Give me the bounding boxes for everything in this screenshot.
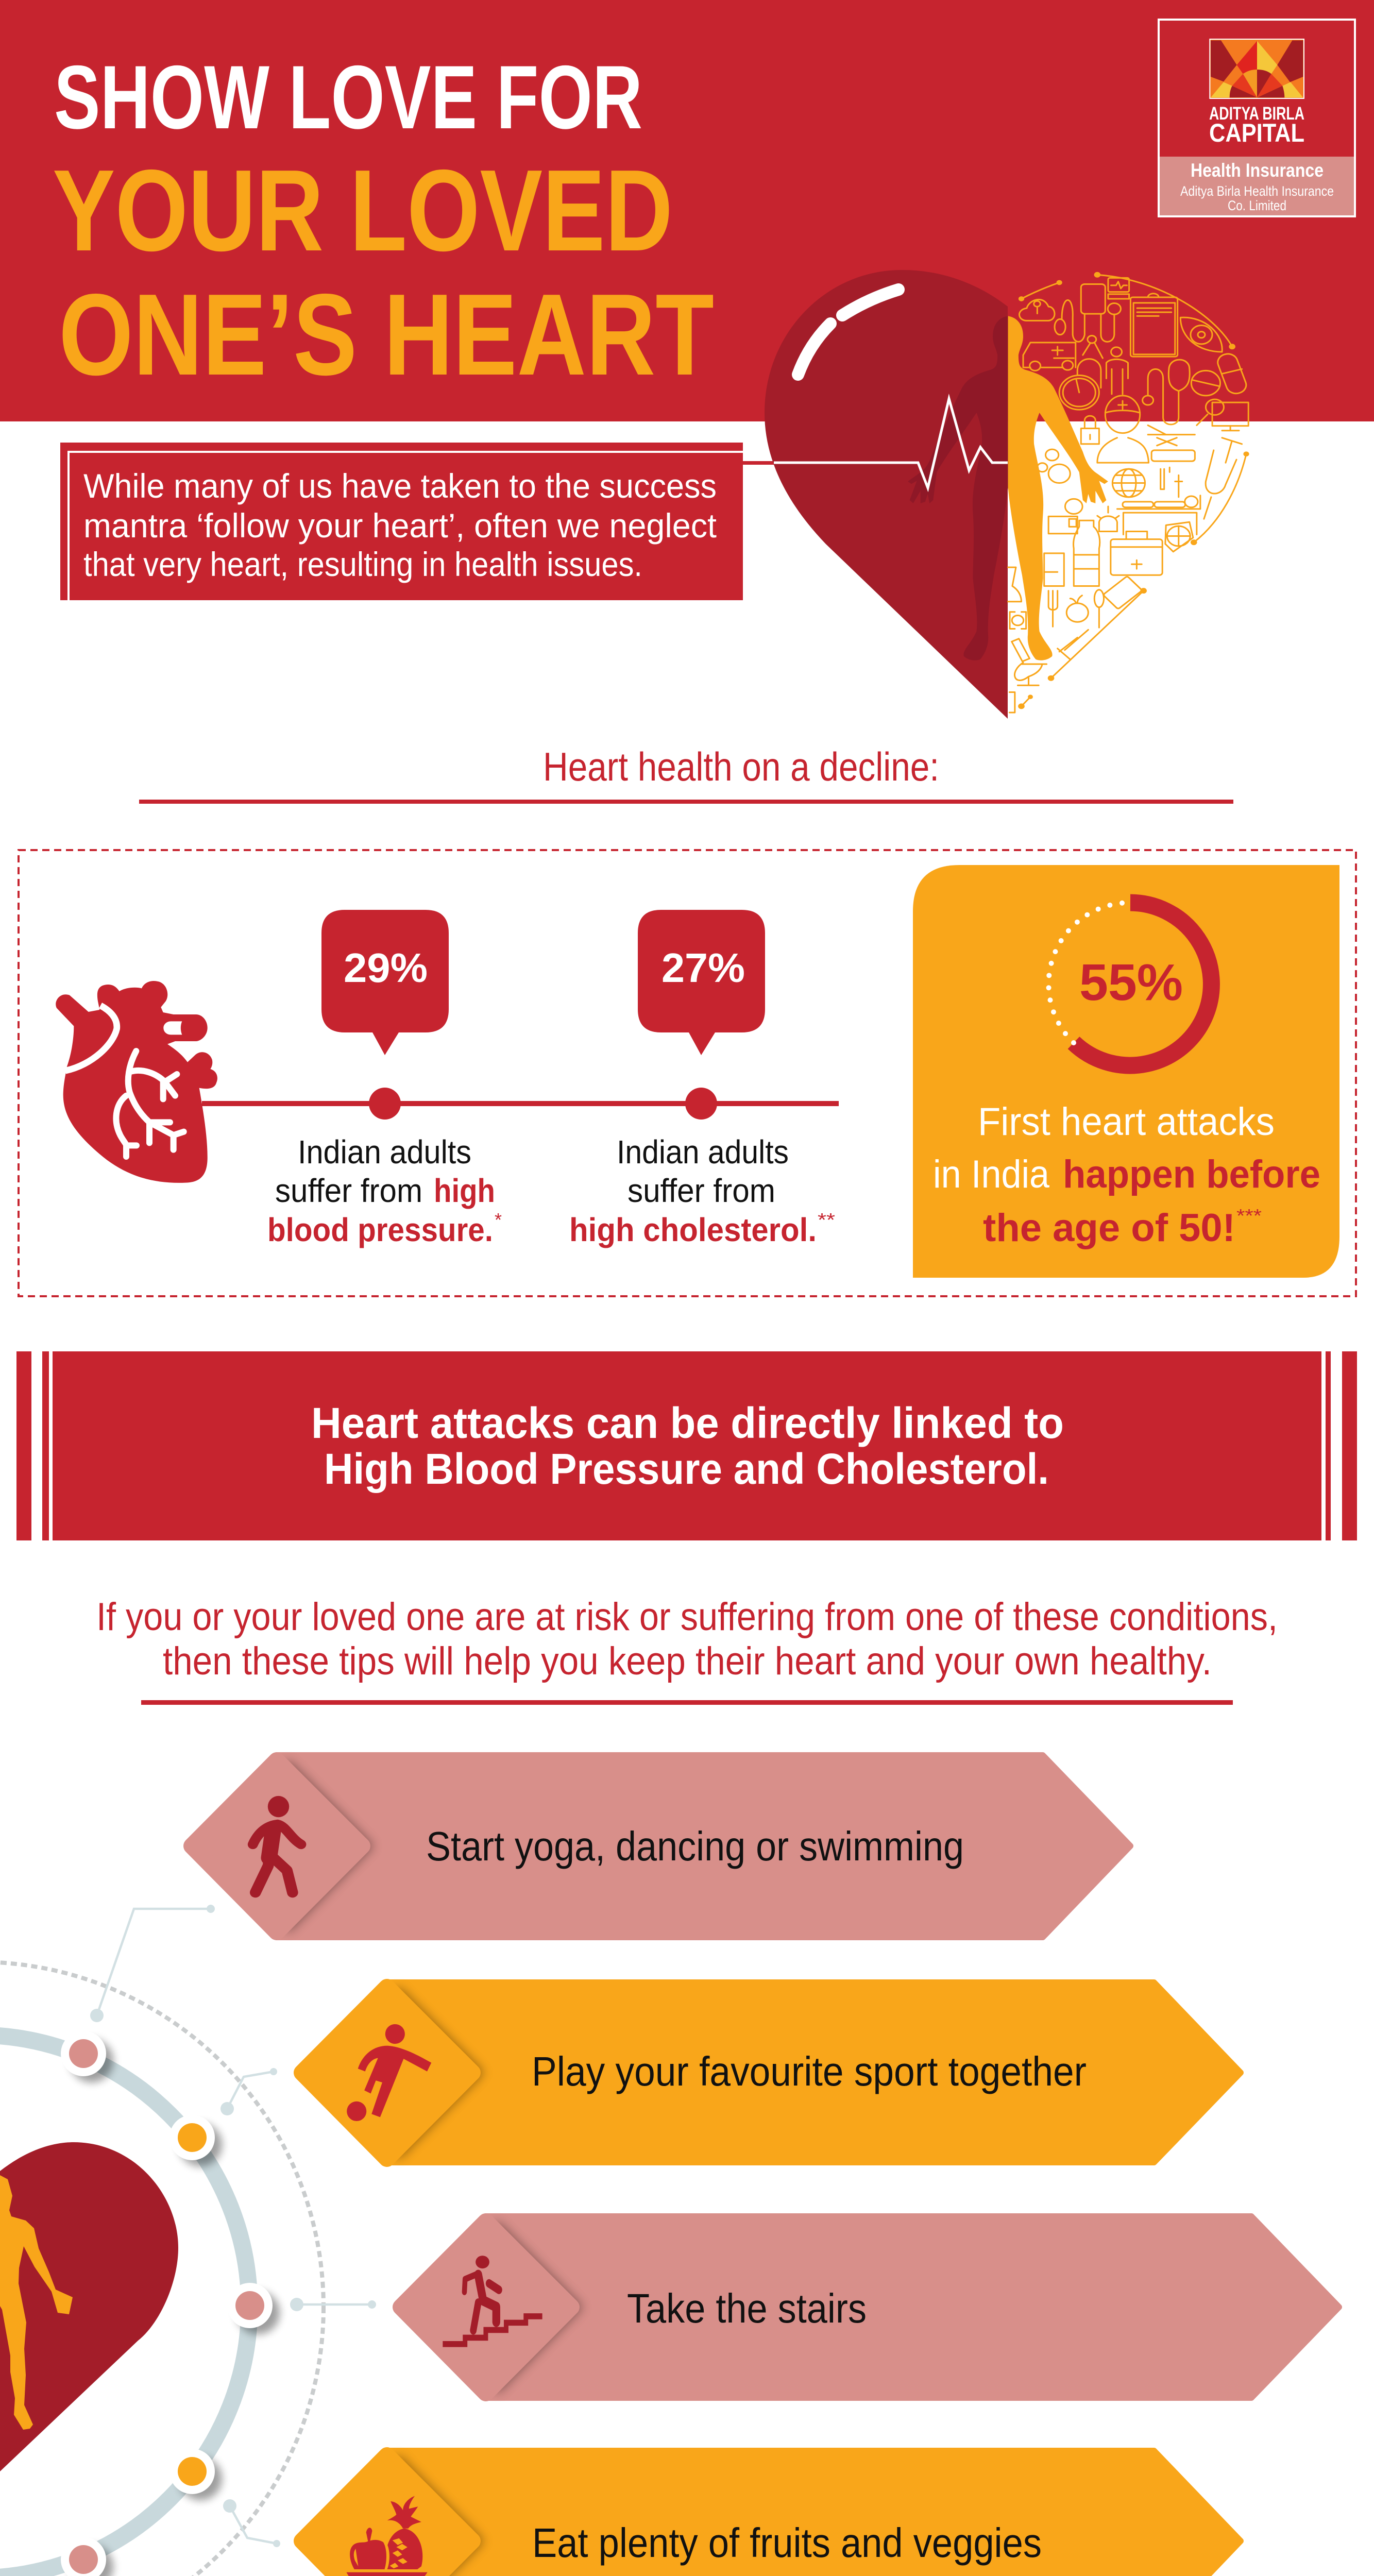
panel: heart health statistics (19, 850, 1356, 1296)
icon: walking person (253, 1796, 301, 1892)
text: high cholesterol stat: ** (818, 1209, 835, 1230)
tip 3: take the stairs (401, 2216, 1339, 2398)
logo: Aditya Birla Capital Health Insurance: Co. Limited (1228, 198, 1286, 213)
text: before age of 50: the age of 50! (983, 1206, 1235, 1250)
intro text box: that very heart, resulting in health issues. (83, 545, 642, 583)
donut chart 55 percent: 55% (1079, 954, 1183, 1011)
text: high cholesterol stat: Indian adults (617, 1133, 789, 1171)
text: high blood pressure stat: * (495, 1209, 502, 1230)
banner: heart attacks linked (16, 1351, 1357, 1540)
icon: kicking person (347, 2024, 431, 2121)
tip 1: yoga, dancing or swimming (192, 1755, 1130, 1937)
tip 2: play sport together: Play your favourite sport together (532, 2048, 1087, 2094)
icon: person on stairs (443, 2256, 542, 2344)
banner: heart attacks linked: Heart attacks can be directly linked to (311, 1399, 1064, 1447)
orange human figure (1008, 316, 1108, 660)
donut chart 55 percent (1048, 903, 1211, 1065)
intro text box: While many of us have taken to the success (83, 467, 717, 505)
text: high cholesterol stat: high cholesterol. (569, 1211, 817, 1248)
text: high blood pressure stat (267, 1133, 502, 1248)
logo: Aditya Birla Capital Health Insurance: CAPITAL (1209, 118, 1304, 147)
timeline line (202, 1101, 839, 1106)
callout: 29 percent (321, 910, 449, 1120)
intro text box (60, 443, 775, 600)
ecg pulse line (774, 399, 1008, 488)
title: YOUR LOVED (53, 145, 673, 275)
text: high cholesterol stat: suffer from (627, 1172, 775, 1209)
tip 3: take the stairs: Take the stairs (627, 2285, 867, 2331)
intro text box: mantra ‘follow your heart’, often we neglect (83, 506, 717, 545)
text: before age of 50: First heart attacks (978, 1100, 1275, 1144)
icon: fruit plate (346, 2496, 428, 2576)
tip 4: fruits and veggies: Eat plenty of fruits and veggies (532, 2520, 1042, 2566)
tip 2: play sport together (302, 1982, 1241, 2162)
medical line icons (1008, 272, 1249, 713)
hero heart illustration (765, 270, 1249, 719)
banner: heart attacks linked: High Blood Pressure and Cholesterol. (324, 1445, 1049, 1493)
title (53, 47, 714, 399)
logo: Aditya Birla Capital Health Insurance: Health Insurance (1191, 160, 1324, 181)
tip 4: fruits and veggies (302, 2451, 1241, 2576)
logo: Aditya Birla Capital Health Insurance: Aditya Birla Health Insurance (1180, 183, 1334, 199)
callout: 29 percent: 29% (344, 945, 428, 991)
section heading: heart health on a decline (139, 744, 1233, 804)
logo: Aditya Birla Capital Health Insurance: ADITYA BIRLA (1209, 104, 1304, 124)
header band (0, 0, 1374, 421)
text: intro to tips: then these tips will help you keep their heart and your own healthy. (163, 1639, 1212, 1683)
text: before age of 50 (933, 1100, 1320, 1250)
title: ONE’S HEART (59, 269, 714, 399)
connector lines (90, 1905, 376, 2576)
icon: anatomical heart (56, 981, 217, 1183)
tip 1: yoga, dancing or swimming: Start yoga, dancing or swimming (426, 1823, 964, 1869)
circular diagram: rings and central heart (0, 1962, 324, 2576)
panel: first heart attacks (913, 865, 1339, 1278)
heart left half (765, 270, 1008, 719)
inner ring (0, 2035, 249, 2576)
text: intro to tips: If you or your loved one are at risk or suffering from one of these conditions, (96, 1595, 1278, 1639)
logo: Aditya Birla Capital Health Insurance (1159, 20, 1355, 216)
callout: 27 percent: 27% (661, 945, 745, 991)
text: high blood pressure stat: Indian adults (298, 1133, 471, 1171)
text: before age of 50: happen before (1063, 1153, 1320, 1196)
logo mark (1210, 39, 1304, 98)
text: intro to tips (96, 1595, 1278, 1705)
text: high cholesterol stat (569, 1133, 835, 1248)
section heading: heart health on a decline: Heart health on a decline: (543, 744, 939, 789)
text: before age of 50: *** (1236, 1205, 1262, 1226)
heart highlights (798, 290, 898, 375)
human figure (0, 2175, 73, 2430)
ring nodes (61, 2031, 280, 2576)
outer dashed ring (0, 1962, 324, 2576)
text: high blood pressure stat: high (434, 1172, 495, 1209)
text: high blood pressure stat: blood pressure. (267, 1211, 493, 1248)
title: SHOW LOVE FOR (54, 47, 642, 148)
body silhouette dark (908, 316, 1008, 660)
text: before age of 50: in India (933, 1153, 1050, 1196)
text: high blood pressure stat: suffer from (275, 1172, 422, 1209)
callout: 27 percent (638, 910, 765, 1120)
central heart (0, 2142, 178, 2471)
